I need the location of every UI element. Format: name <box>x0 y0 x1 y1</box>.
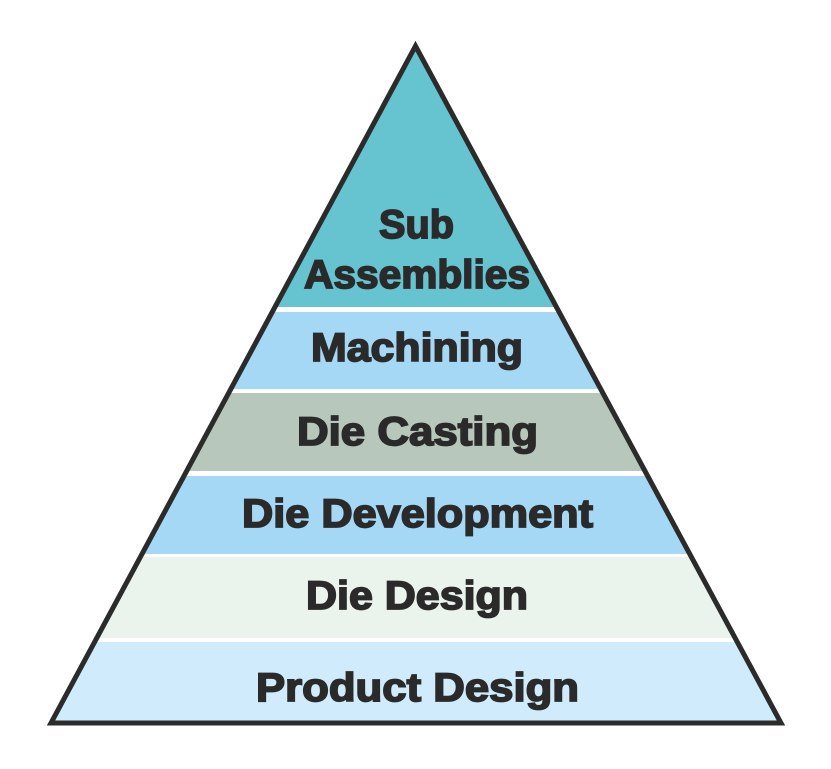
pyramid outline <box>51 46 781 723</box>
band: machining <box>234 312 598 389</box>
label: Die Development: Die Development <box>242 492 593 536</box>
label: Machining: Machining <box>311 326 523 370</box>
band: die casting <box>190 393 642 471</box>
band: die development <box>145 476 687 554</box>
band: sub assemblies <box>278 51 554 307</box>
pyramid bands <box>55 51 777 720</box>
label: Die Casting: Die Casting <box>297 410 538 454</box>
band: die design <box>100 557 732 638</box>
label: Sub Assemblies: Sub <box>379 203 454 247</box>
pyramid diagram <box>46 40 786 726</box>
label: Sub Assemblies <box>304 203 530 297</box>
band: product design <box>55 642 777 720</box>
label: Product Design: Product Design <box>256 666 579 710</box>
label: Die Design: Die Design <box>306 574 528 618</box>
label: Sub Assemblies: Assemblies <box>304 253 530 297</box>
